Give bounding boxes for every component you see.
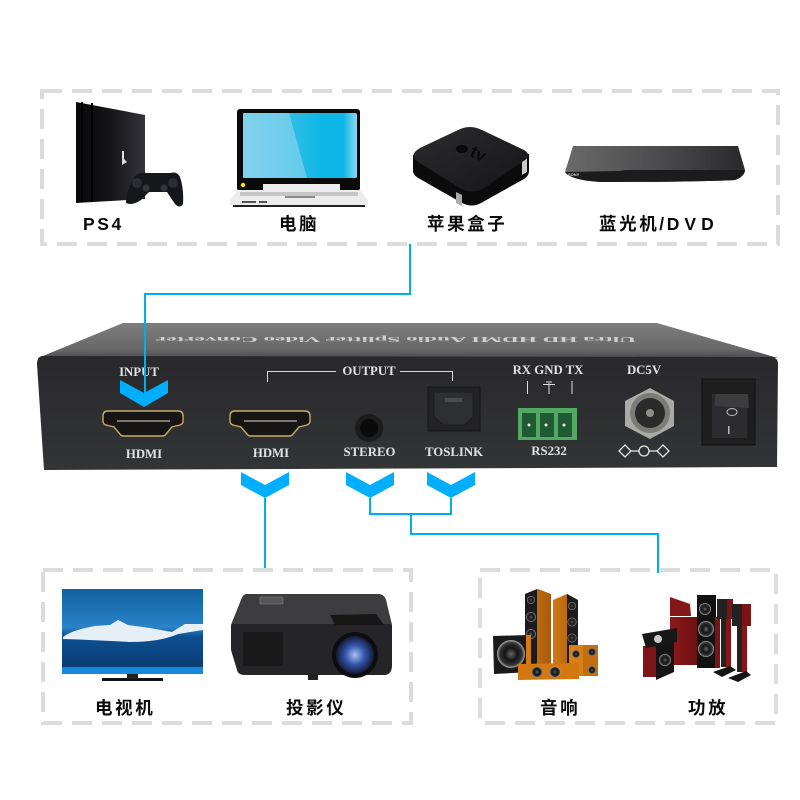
label: PS4: PS4	[83, 214, 124, 234]
arrow: input chevron	[120, 380, 168, 407]
label: RS232: RS232	[531, 444, 567, 458]
icon: laptop	[230, 109, 368, 207]
label: RX GND TX: RX GND TX	[513, 363, 584, 377]
port: HDMI output	[230, 411, 310, 436]
arrow: toslink chevron	[427, 472, 475, 498]
connector: audio to speakers	[370, 498, 658, 573]
arrow: HDMI output chevron	[241, 472, 289, 498]
connector: source to input	[145, 244, 410, 393]
panel: input sources	[42, 91, 778, 244]
device: front panel	[37, 356, 778, 470]
device: top surface: Ultra HD HDMI Audio Splitter Video Converter	[155, 335, 636, 342]
port: DC jack	[625, 388, 674, 439]
label: HDMI output: HDMI	[253, 446, 289, 460]
label: OUTPUT bracket: OUTPUT	[342, 364, 396, 378]
connector: HDMI to display	[264, 498, 266, 569]
label: RX GND TX	[513, 363, 584, 394]
label: DC5V: DC5V	[627, 363, 662, 377]
icon: PS4 console	[76, 102, 183, 206]
port: RS232 terminal	[518, 408, 577, 440]
icon: Blu-ray player: SONY	[568, 172, 580, 177]
port: HDMI input	[103, 411, 183, 436]
label: computer: 电脑	[279, 214, 319, 234]
panel: display outputs	[43, 570, 411, 723]
icon: television	[62, 589, 203, 681]
label: INPUT: INPUT	[119, 365, 159, 379]
label: projector: 投影仪	[286, 698, 346, 718]
icon: amplifier system	[642, 595, 751, 682]
icon: Apple TV	[413, 127, 529, 206]
icon: polarity symbol	[619, 445, 669, 457]
switch: power rocker	[702, 379, 755, 445]
label: STEREO: STEREO	[344, 445, 396, 459]
label: speakers: 音响	[540, 698, 580, 718]
label: television: 电视机	[95, 698, 155, 718]
icon: projector	[231, 594, 392, 680]
label: Apple box: 苹果盒子	[427, 214, 507, 234]
icon: Blu-ray player	[565, 146, 745, 182]
icon: Apple TV: tv	[467, 142, 489, 166]
port: TOSLINK	[428, 387, 480, 431]
label: HDMI input: HDMI	[126, 447, 162, 461]
label: amplifier: 功放	[688, 698, 728, 718]
device: top surface	[38, 323, 778, 358]
port: stereo jack	[355, 414, 383, 442]
panel: audio outputs	[480, 570, 776, 723]
arrow: stereo chevron	[346, 472, 394, 498]
label: TOSLINK: TOSLINK	[425, 445, 483, 459]
label: Blu-ray/DVD: 蓝光机/DVD	[599, 214, 719, 234]
label: OUTPUT bracket	[268, 364, 452, 382]
icon: speakers set	[493, 589, 598, 680]
